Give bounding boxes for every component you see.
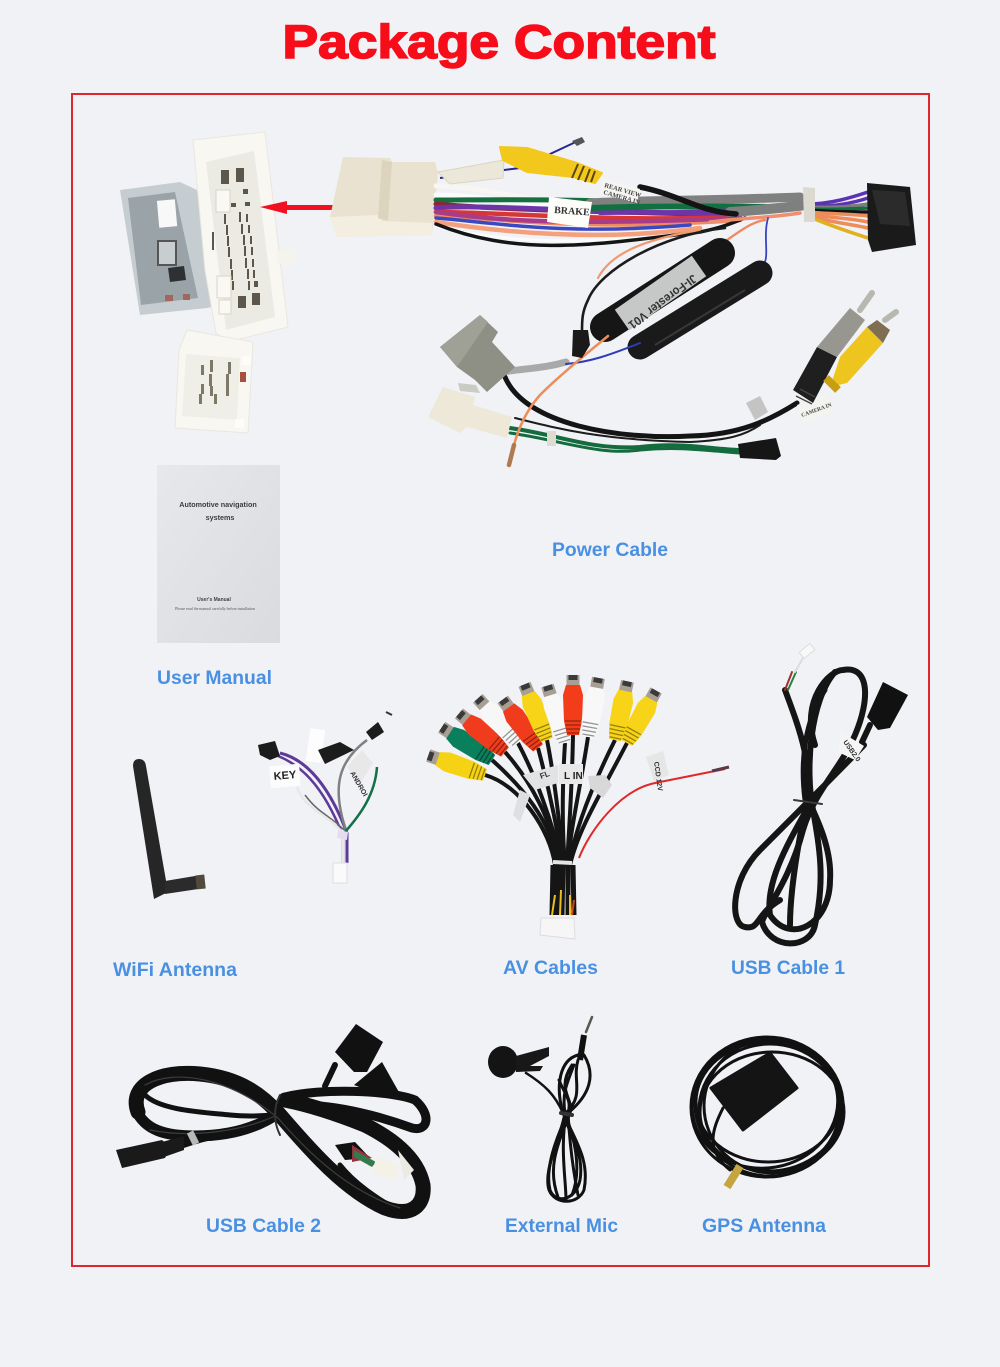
icon: filter modules <box>605 253 760 347</box>
label: AV cables: AV Cables <box>503 957 598 979</box>
icon: GPS cable coil <box>682 1028 848 1180</box>
icon: small antenna lead <box>440 140 580 178</box>
icon: audio jack <box>580 1017 592 1060</box>
label: key: KEY <box>273 769 297 783</box>
icon: cable tie <box>803 187 815 222</box>
icon: manual booklet: User's Manual <box>197 597 231 603</box>
wire: red lead <box>579 769 725 858</box>
label: power cable: Power Cable <box>552 539 668 561</box>
icon: mic clip <box>516 1047 549 1072</box>
icon: USB 2 coil <box>136 1073 426 1216</box>
icon: manual booklet: Please read the manual carefully before installation <box>175 607 255 611</box>
label: brake <box>547 197 592 228</box>
icon: silver and yellow RCA plugs <box>793 293 896 404</box>
label: external mic: External Mic <box>505 1215 618 1237</box>
panel: user manual <box>157 465 280 643</box>
label: small wire tag: ANDROI <box>348 770 368 798</box>
panel: USB cable 1 <box>735 643 908 943</box>
label: wifi antenna: WiFi Antenna <box>113 959 237 981</box>
icon: white tag <box>306 728 325 763</box>
label: rear view camera: CAMERA IN <box>602 189 641 206</box>
icon: small white connector <box>175 330 253 433</box>
icon: small silver tie <box>190 1132 196 1144</box>
wires: RCA leads <box>485 735 627 865</box>
chart: AV cables <box>425 675 729 939</box>
icon: cable tip connector <box>785 643 815 690</box>
panel: power cable <box>120 132 916 465</box>
icon: black connector right <box>366 722 384 740</box>
icon: mic coil <box>548 1055 590 1201</box>
text: manual title: Automotive navigation <box>179 500 257 509</box>
wires: main harness bundle <box>436 186 868 332</box>
labels: wire tags: CCD 12V <box>652 761 663 792</box>
icon: USB tag <box>838 732 864 763</box>
label: GPS antenna: GPS Antenna <box>702 1215 826 1237</box>
label: small wire tag <box>347 750 373 798</box>
icon: RCA plugs <box>425 675 665 784</box>
red frame <box>72 94 929 1266</box>
icon: beige lower connector <box>428 387 512 438</box>
label: USB cable 2: USB Cable 2 <box>206 1215 321 1237</box>
icon: black 2 pin connector <box>738 438 781 460</box>
icon: camera tags <box>746 394 833 424</box>
icon: GPS receiver <box>711 1053 797 1130</box>
label: brake: BRAKE <box>554 205 590 218</box>
icon: USB 1 coil <box>735 670 865 943</box>
icon: mic foam <box>488 1046 518 1078</box>
label: user manual: User Manual <box>157 667 272 689</box>
icon: black harness connector <box>867 183 916 252</box>
icon: tie and connector <box>553 862 572 863</box>
icon: grey connector <box>120 182 222 315</box>
panel: external mic <box>488 1017 592 1201</box>
icon: tie <box>794 800 822 804</box>
icon: tie <box>275 1095 280 1135</box>
icon: black connector middle <box>318 742 354 764</box>
icon: grey lower connector <box>440 315 515 393</box>
icon: audio jack <box>116 1136 184 1168</box>
label: key <box>269 764 301 788</box>
panel: GPS antenna <box>682 1028 848 1187</box>
panel: USB cable 2 <box>116 1024 426 1216</box>
icon: cable tie on green wire <box>547 431 556 446</box>
icon: USB tag: USB2.0 <box>841 739 861 763</box>
wires: lower harness <box>502 336 797 465</box>
icon: white connector <box>335 1142 414 1180</box>
icon: manual booklet: systems <box>206 513 234 522</box>
wire: mic lead <box>526 1073 563 1113</box>
labels: wire tags: L IN <box>564 771 583 782</box>
labels: wire tags <box>513 751 669 822</box>
panel: key harness <box>258 712 392 883</box>
panel: wifi antenna <box>133 759 206 899</box>
icon: yellow RCA plug <box>500 147 602 183</box>
title: Package Content <box>282 15 716 68</box>
icon: white connector <box>333 863 347 883</box>
icon: SMA connector <box>727 1166 740 1187</box>
label: rear view camera: REAR VIEW <box>603 182 642 200</box>
icon: filter modules: JI-Forester V01 <box>625 272 700 332</box>
icon: beige connector <box>330 157 438 237</box>
icon: camera tags: CAMERA IN <box>801 402 833 419</box>
label: USB cable 1: USB Cable 1 <box>731 957 845 979</box>
arrow: red pointer <box>260 201 335 214</box>
icon: manual booklet <box>157 465 280 643</box>
icon: white main connector <box>193 132 295 342</box>
label: rear view camera <box>600 178 642 206</box>
icon: small black plug <box>572 330 590 358</box>
icon: USB plugs <box>335 1024 400 1095</box>
icon: USB plug <box>867 682 908 730</box>
icon: antenna <box>133 759 206 899</box>
labels: wire tags: FL <box>539 769 551 781</box>
icon: black connector left <box>258 741 280 760</box>
